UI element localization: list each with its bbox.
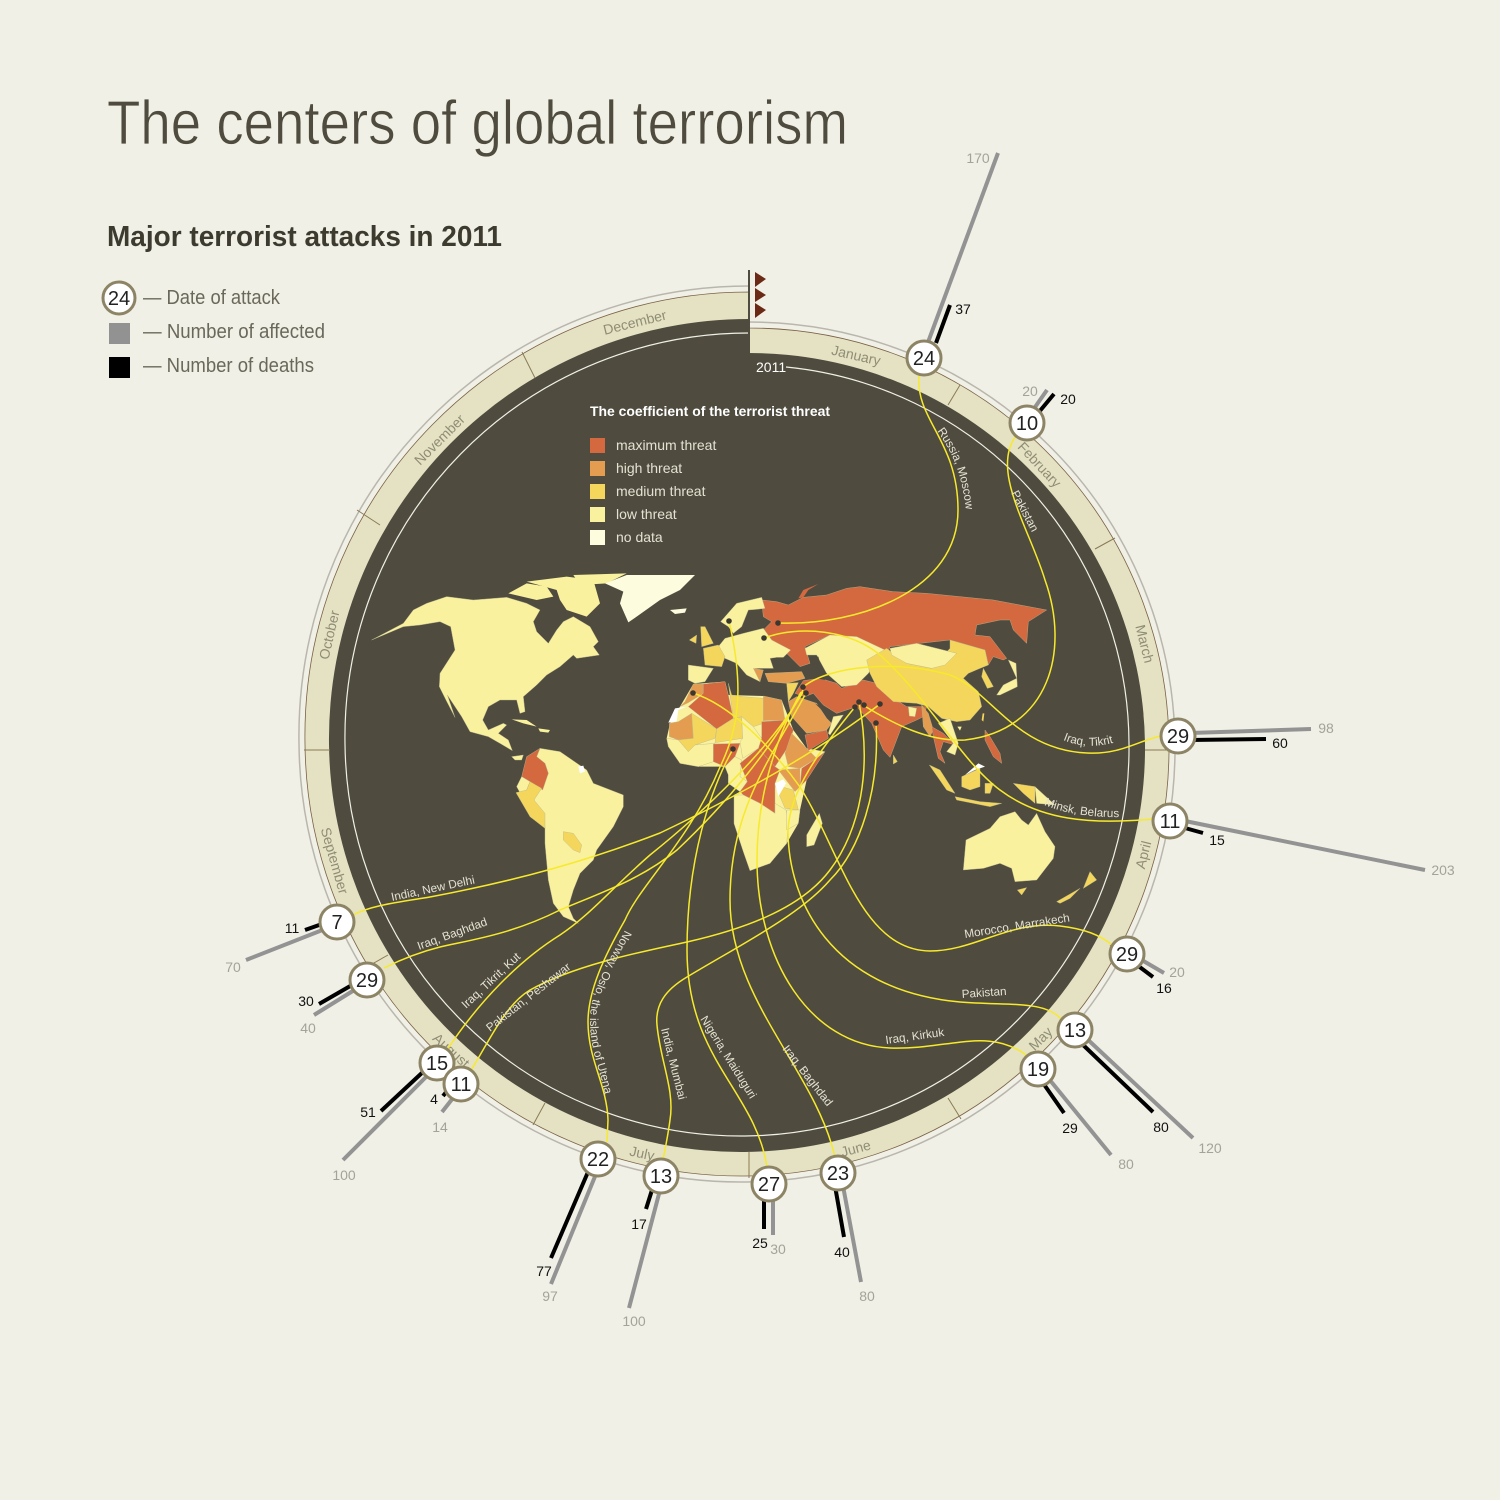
marker: April 11 — [1153, 804, 1455, 878]
marker: July 22: 97 — [542, 1288, 558, 1304]
marker: January 24: 24 — [913, 348, 935, 370]
marker: August 11: 11 — [451, 1074, 471, 1096]
marker: July 13: 100 — [622, 1313, 646, 1329]
dark disc — [329, 319, 1145, 1152]
outer thin ring — [299, 286, 1175, 1182]
curve labels: Pakistan, Peshawar — [484, 960, 573, 1034]
curve labels: Iraq, Baghdad — [416, 915, 489, 953]
marker: July 13: 17 — [631, 1216, 647, 1232]
marker: June 27: 27 — [758, 1174, 780, 1196]
curve labels: Nigeria, Maiduguri — [697, 1014, 759, 1101]
title: The centers of global terrorism — [107, 89, 848, 158]
marker: June 23: 80 — [859, 1288, 875, 1304]
marker: August 11: 4 — [430, 1091, 438, 1107]
marker: August 11 — [430, 1067, 478, 1135]
connector: Iraq, Kirkuk — [757, 692, 1030, 1058]
americas — [372, 573, 695, 923]
marker: August 15: 100 — [332, 1167, 356, 1183]
europe — [688, 597, 885, 687]
marker: February 10: 10 — [1016, 413, 1038, 435]
marker: April 29: 20 — [1169, 964, 1185, 980]
marker: June 23 — [821, 1156, 875, 1304]
threat legend: high threat — [616, 460, 682, 476]
east asia and oceania — [867, 640, 1097, 903]
month labels: December — [602, 306, 668, 338]
threat legend: medium threat — [616, 483, 706, 499]
marker: June 23: 40 — [834, 1244, 850, 1260]
marker: May 13: 120 — [1198, 1140, 1222, 1156]
month labels: March — [1132, 623, 1157, 665]
connector: India, New Delhi — [353, 704, 880, 915]
marker: August 29: 29 — [356, 970, 378, 992]
marker: September 7: 11 — [285, 920, 299, 936]
month band — [305, 292, 1169, 1176]
marker: June 27 — [752, 1167, 786, 1257]
marker: May 19: 80 — [1118, 1156, 1134, 1172]
marker: June 27: 30 — [770, 1241, 786, 1257]
threat legend: The coefficient of the terrorist threat — [590, 403, 830, 419]
marker: July 22: 77 — [536, 1263, 552, 1279]
africa and arabia — [667, 682, 843, 871]
marker: April 29: 29 — [1116, 944, 1138, 966]
russia and south asia — [762, 584, 1047, 764]
calendar spiral dial — [299, 270, 1175, 1182]
marker: May 13 — [1058, 1013, 1222, 1156]
curve labels: Iraq, Tikrit, Kut — [459, 950, 524, 1011]
marker: April 11: 11 — [1160, 811, 1180, 833]
month labels: November — [411, 411, 468, 468]
curve labels: Pakistan — [1008, 488, 1041, 534]
connector: India, Mumbai — [657, 723, 877, 1160]
marker: July 22: 22 — [587, 1149, 609, 1171]
connector: Pakistan (February) — [863, 436, 1055, 740]
connector: Norway, Oslo — [588, 621, 738, 1142]
month labels: January — [830, 342, 882, 369]
subtitle: Major terrorist attacks in 2011 — [107, 221, 502, 253]
year axis and flags: 2011 — [756, 359, 786, 375]
month labels: April — [1132, 839, 1154, 870]
marker: May 13: 13 — [1064, 1020, 1086, 1042]
attack location dots — [690, 618, 883, 752]
marker: January 24: 170 — [966, 150, 990, 166]
marker: May 13: 80 — [1153, 1119, 1169, 1135]
marker: August 15: 15 — [426, 1053, 448, 1075]
connector: Nigeria, Maiduguri — [687, 749, 767, 1167]
marker: August 29: 30 — [298, 993, 314, 1009]
curve labels: India, New Delhi — [390, 874, 476, 904]
marker: July 13: 13 — [650, 1166, 672, 1188]
world map — [372, 573, 1097, 923]
connector: Morocco, Marrakech — [693, 693, 1112, 951]
threat legend — [590, 403, 830, 545]
marker: May 19: 19 — [1027, 1059, 1049, 1081]
marker: April 29: 16 — [1156, 980, 1172, 996]
connector: Pakistan, Peshawar — [470, 702, 864, 1072]
marker: January 24: 37 — [955, 301, 971, 317]
marker: September 7 — [225, 905, 354, 975]
legend: date of attack — [103, 282, 281, 314]
legend: date of attack: — Date of attack — [143, 287, 281, 309]
connector: Russia, Moscow — [778, 375, 958, 623]
threat legend: no data — [616, 529, 663, 545]
connector: Pakistan (May) — [788, 707, 1062, 1020]
month labels: September — [318, 826, 352, 896]
curve labels: Russia, Moscow — [938, 427, 972, 509]
marker: June 23: 23 — [827, 1163, 849, 1185]
marker: September 7: 70 — [225, 959, 241, 975]
marker: May 19: 29 — [1062, 1120, 1078, 1136]
marker: July 13 — [622, 1159, 678, 1329]
month labels — [316, 306, 1157, 1164]
marker: April 11: 203 — [1431, 862, 1455, 878]
curve labels: India, Mumbai — [658, 1027, 688, 1101]
marker: March 29 — [1161, 719, 1334, 753]
marker: May 19 — [1021, 1052, 1134, 1172]
curve labels: Iraq, Tikrit — [1064, 732, 1114, 748]
marker: June 27: 25 — [752, 1235, 768, 1251]
legend: date of attack: 24 — [108, 288, 130, 310]
marker: March 29: 29 — [1167, 726, 1189, 748]
marker: August 15: 51 — [360, 1104, 376, 1120]
connector curves — [353, 375, 1161, 1167]
attack markers — [225, 150, 1455, 1329]
month labels: June — [839, 1136, 873, 1160]
month labels: July — [628, 1143, 656, 1164]
marker: February 10 — [1010, 383, 1076, 440]
threat legend: maximum threat — [616, 437, 716, 453]
curve labels: Minsk, Belarus — [1044, 798, 1119, 818]
marker: August 15 — [332, 1046, 454, 1183]
curve labels: Iraq, Kirkuk — [885, 1026, 945, 1047]
curve labels — [350, 398, 1158, 1149]
legend: bar and date key — [103, 282, 325, 378]
marker: August 29: 40 — [300, 1020, 316, 1036]
marker: February 10: 20 — [1060, 391, 1076, 407]
curve labels: Morocco, Marrakech — [963, 911, 1071, 941]
curve labels: Pakistan — [961, 985, 1007, 1001]
marker: August 29 — [298, 963, 384, 1036]
marker: July 22 — [536, 1142, 615, 1304]
connector: Iraq, Baghdad (August) — [384, 690, 803, 968]
threat legend: low threat — [616, 506, 677, 522]
month labels: October — [316, 608, 343, 661]
legend: number of affected: — Number of affected — [143, 321, 325, 343]
month labels: February — [1015, 439, 1065, 491]
marker: March 29: 60 — [1272, 735, 1288, 751]
marker: February 10: 20 — [1022, 383, 1038, 399]
year axis and flags — [749, 270, 786, 377]
marker: September 7: 7 — [331, 912, 343, 934]
connector: Iraq, Tikrit, Kut — [447, 692, 803, 1050]
curve labels: Norway, Oslo, the island of Utena — [590, 930, 632, 1094]
marker: January 24 — [907, 150, 998, 375]
connector: Iraq, Baghdad (June) — [730, 693, 835, 1157]
legend: number of deaths: — Number of deaths — [143, 355, 314, 377]
marker: April 11: 15 — [1209, 832, 1225, 848]
curve labels: Iraq, Baghdad — [780, 1043, 835, 1109]
marker: August 11: 14 — [432, 1119, 448, 1135]
marker: March 29: 98 — [1318, 720, 1334, 736]
connector: Minsk, Belarus — [764, 631, 1153, 821]
marker: April 29 — [1110, 937, 1185, 996]
month labels: May — [1025, 1023, 1055, 1053]
connector: Iraq, Tikrit — [803, 666, 1161, 753]
month labels: August — [430, 1030, 473, 1071]
